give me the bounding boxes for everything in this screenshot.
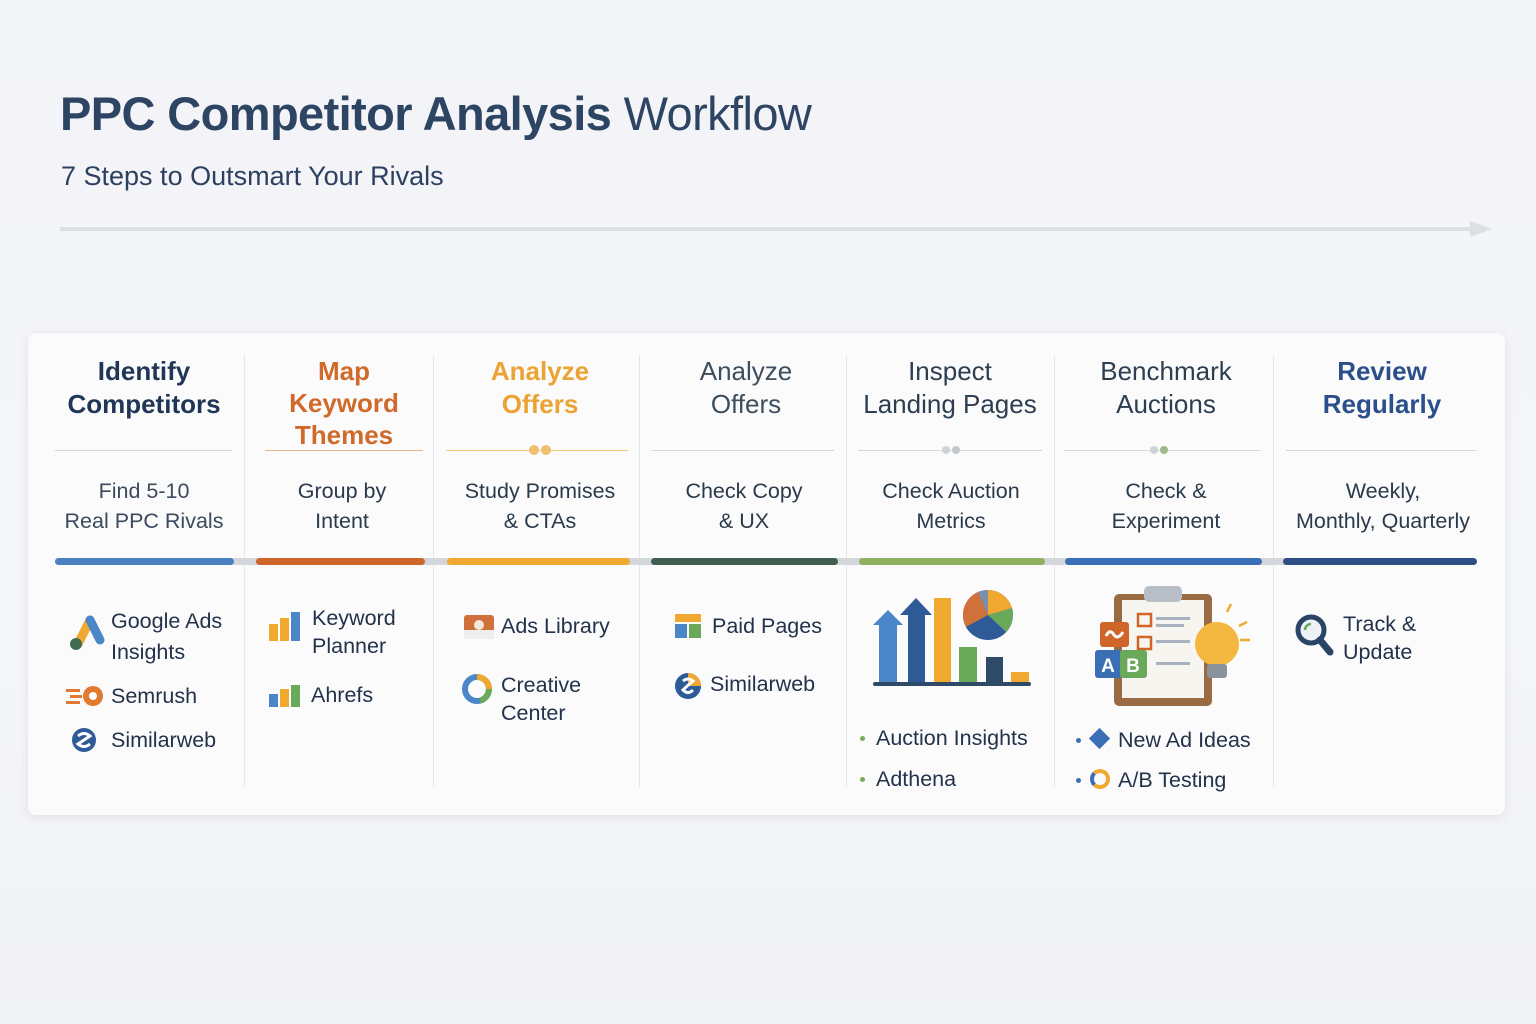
text: step 6 detail: [1112, 479, 1220, 533]
heading: step 6: Benchmark: [1100, 356, 1232, 386]
subtitle: 7 Steps to Outsmart Your Rivals: [61, 161, 444, 191]
heading: step 4: [700, 356, 792, 419]
panel: workflow card: [28, 333, 1505, 815]
heading: step 5: [863, 356, 1037, 419]
heading: step 2: Map: [318, 356, 370, 386]
icon: creative center: [462, 674, 492, 704]
text: step 4 detail: Check Copy: [685, 479, 803, 503]
text: step 1 detail: [65, 479, 223, 533]
text: step 4 detail: & UX: [719, 509, 769, 533]
text: google ads insights: [111, 609, 222, 664]
icon: clipboard with lightbulb: A: [1101, 656, 1115, 677]
text: ahrefs: Ahrefs: [311, 683, 373, 707]
icon: keyword planner: [269, 612, 300, 641]
icon: similarweb 2: [675, 673, 701, 699]
heading: step 1: Identify: [98, 356, 190, 386]
arrow: timeline: [60, 221, 1492, 237]
heading: step 1: [67, 356, 221, 419]
text: creative center: Center: [501, 701, 566, 725]
text: step 5 detail: Check Auction: [882, 479, 1020, 503]
chart: auction bars and pie: [873, 590, 1031, 686]
text: step 7 detail: Monthly, Quarterly: [1296, 509, 1470, 533]
text: paid pages: Paid Pages: [712, 614, 822, 638]
icon: semrush: [66, 686, 103, 706]
text: track & update: Update: [1343, 640, 1412, 664]
text: google ads insights: Google Ads: [111, 609, 222, 633]
text: similarweb 2: Similarweb: [710, 672, 815, 696]
icon: clipboard with lightbulb: B: [1126, 656, 1140, 677]
text: step 5 detail: [882, 479, 1020, 533]
list: step 5 tools: Auction Insights: [876, 726, 1028, 750]
text: keyword planner: Keyword: [312, 606, 396, 630]
text: step 6 detail: Check &: [1125, 479, 1207, 503]
heading: step 2: Themes: [295, 420, 393, 450]
text: step 1 detail: Real PPC Rivals: [65, 509, 223, 533]
list: step 6 outcomes: A/B Testing: [1118, 768, 1226, 792]
icon: ahrefs: [269, 685, 300, 707]
icon: similarweb: [72, 728, 96, 752]
heading: step 7: Review: [1337, 356, 1427, 386]
heading: step 1: Competitors: [67, 389, 221, 419]
icon: paid pages: [675, 614, 701, 638]
text: step 6 detail: Experiment: [1112, 509, 1220, 533]
text: step 3 detail: Study Promises: [465, 479, 615, 503]
text: creative center: [501, 673, 581, 725]
text: ads library: Ads Library: [501, 614, 610, 638]
icon: clipboard with lightbulb: [1095, 586, 1250, 706]
icon: ads library: [464, 615, 494, 639]
progress bar track: [55, 558, 1477, 565]
text: semrush: Semrush: [111, 684, 197, 708]
text: step 7 detail: Weekly,: [1346, 479, 1420, 503]
text: keyword planner: [312, 606, 396, 658]
heading: step 7: [1323, 356, 1441, 419]
heading: step 6: Auctions: [1116, 389, 1216, 419]
text: google ads insights: Insights: [111, 640, 185, 664]
text: step 5 detail: Metrics: [916, 509, 986, 533]
list: step 5 tools: [860, 726, 1028, 791]
list: step 6 outcomes: New Ad Ideas: [1118, 728, 1251, 752]
text: creative center: Creative: [501, 673, 581, 697]
text: step 7 detail: [1296, 479, 1470, 533]
text: step 2 detail: Intent: [315, 509, 369, 533]
text: track & update: [1343, 612, 1416, 664]
list: step 5 tools: Adthena: [876, 767, 956, 791]
heading: step 3: Offers: [502, 389, 578, 419]
text: step 1 detail: Find 5-10: [99, 479, 189, 503]
heading: step 4: Analyze: [700, 356, 792, 386]
heading: step 4: Offers: [711, 389, 781, 419]
heading: step 3: Analyze: [491, 356, 589, 386]
icon: magnifier: [1296, 614, 1334, 656]
text: keyword planner: Planner: [312, 634, 386, 658]
text: step 3 detail: [465, 479, 615, 533]
title: PPC Competitor Analysis Workflow: [60, 87, 811, 140]
text: track & update: Track &: [1343, 612, 1416, 636]
list: step 6 outcomes: [1076, 728, 1251, 792]
text: step 3 detail: & CTAs: [504, 509, 576, 533]
icon: google ads: [70, 616, 104, 650]
heading: step 5: Landing Pages: [863, 389, 1037, 419]
text: step 2 detail: Group by: [298, 479, 386, 503]
heading: step 2: [289, 356, 399, 450]
heading: step 6: [1100, 356, 1232, 419]
heading: step 3: [491, 356, 589, 419]
text: step 4 detail: [685, 479, 803, 533]
text: similarweb: Similarweb: [111, 728, 216, 752]
heading: step 7: Regularly: [1323, 389, 1441, 419]
heading: step 5: Inspect: [908, 356, 992, 386]
text: step 2 detail: [298, 479, 386, 533]
heading: step 2: Keyword: [289, 388, 399, 418]
